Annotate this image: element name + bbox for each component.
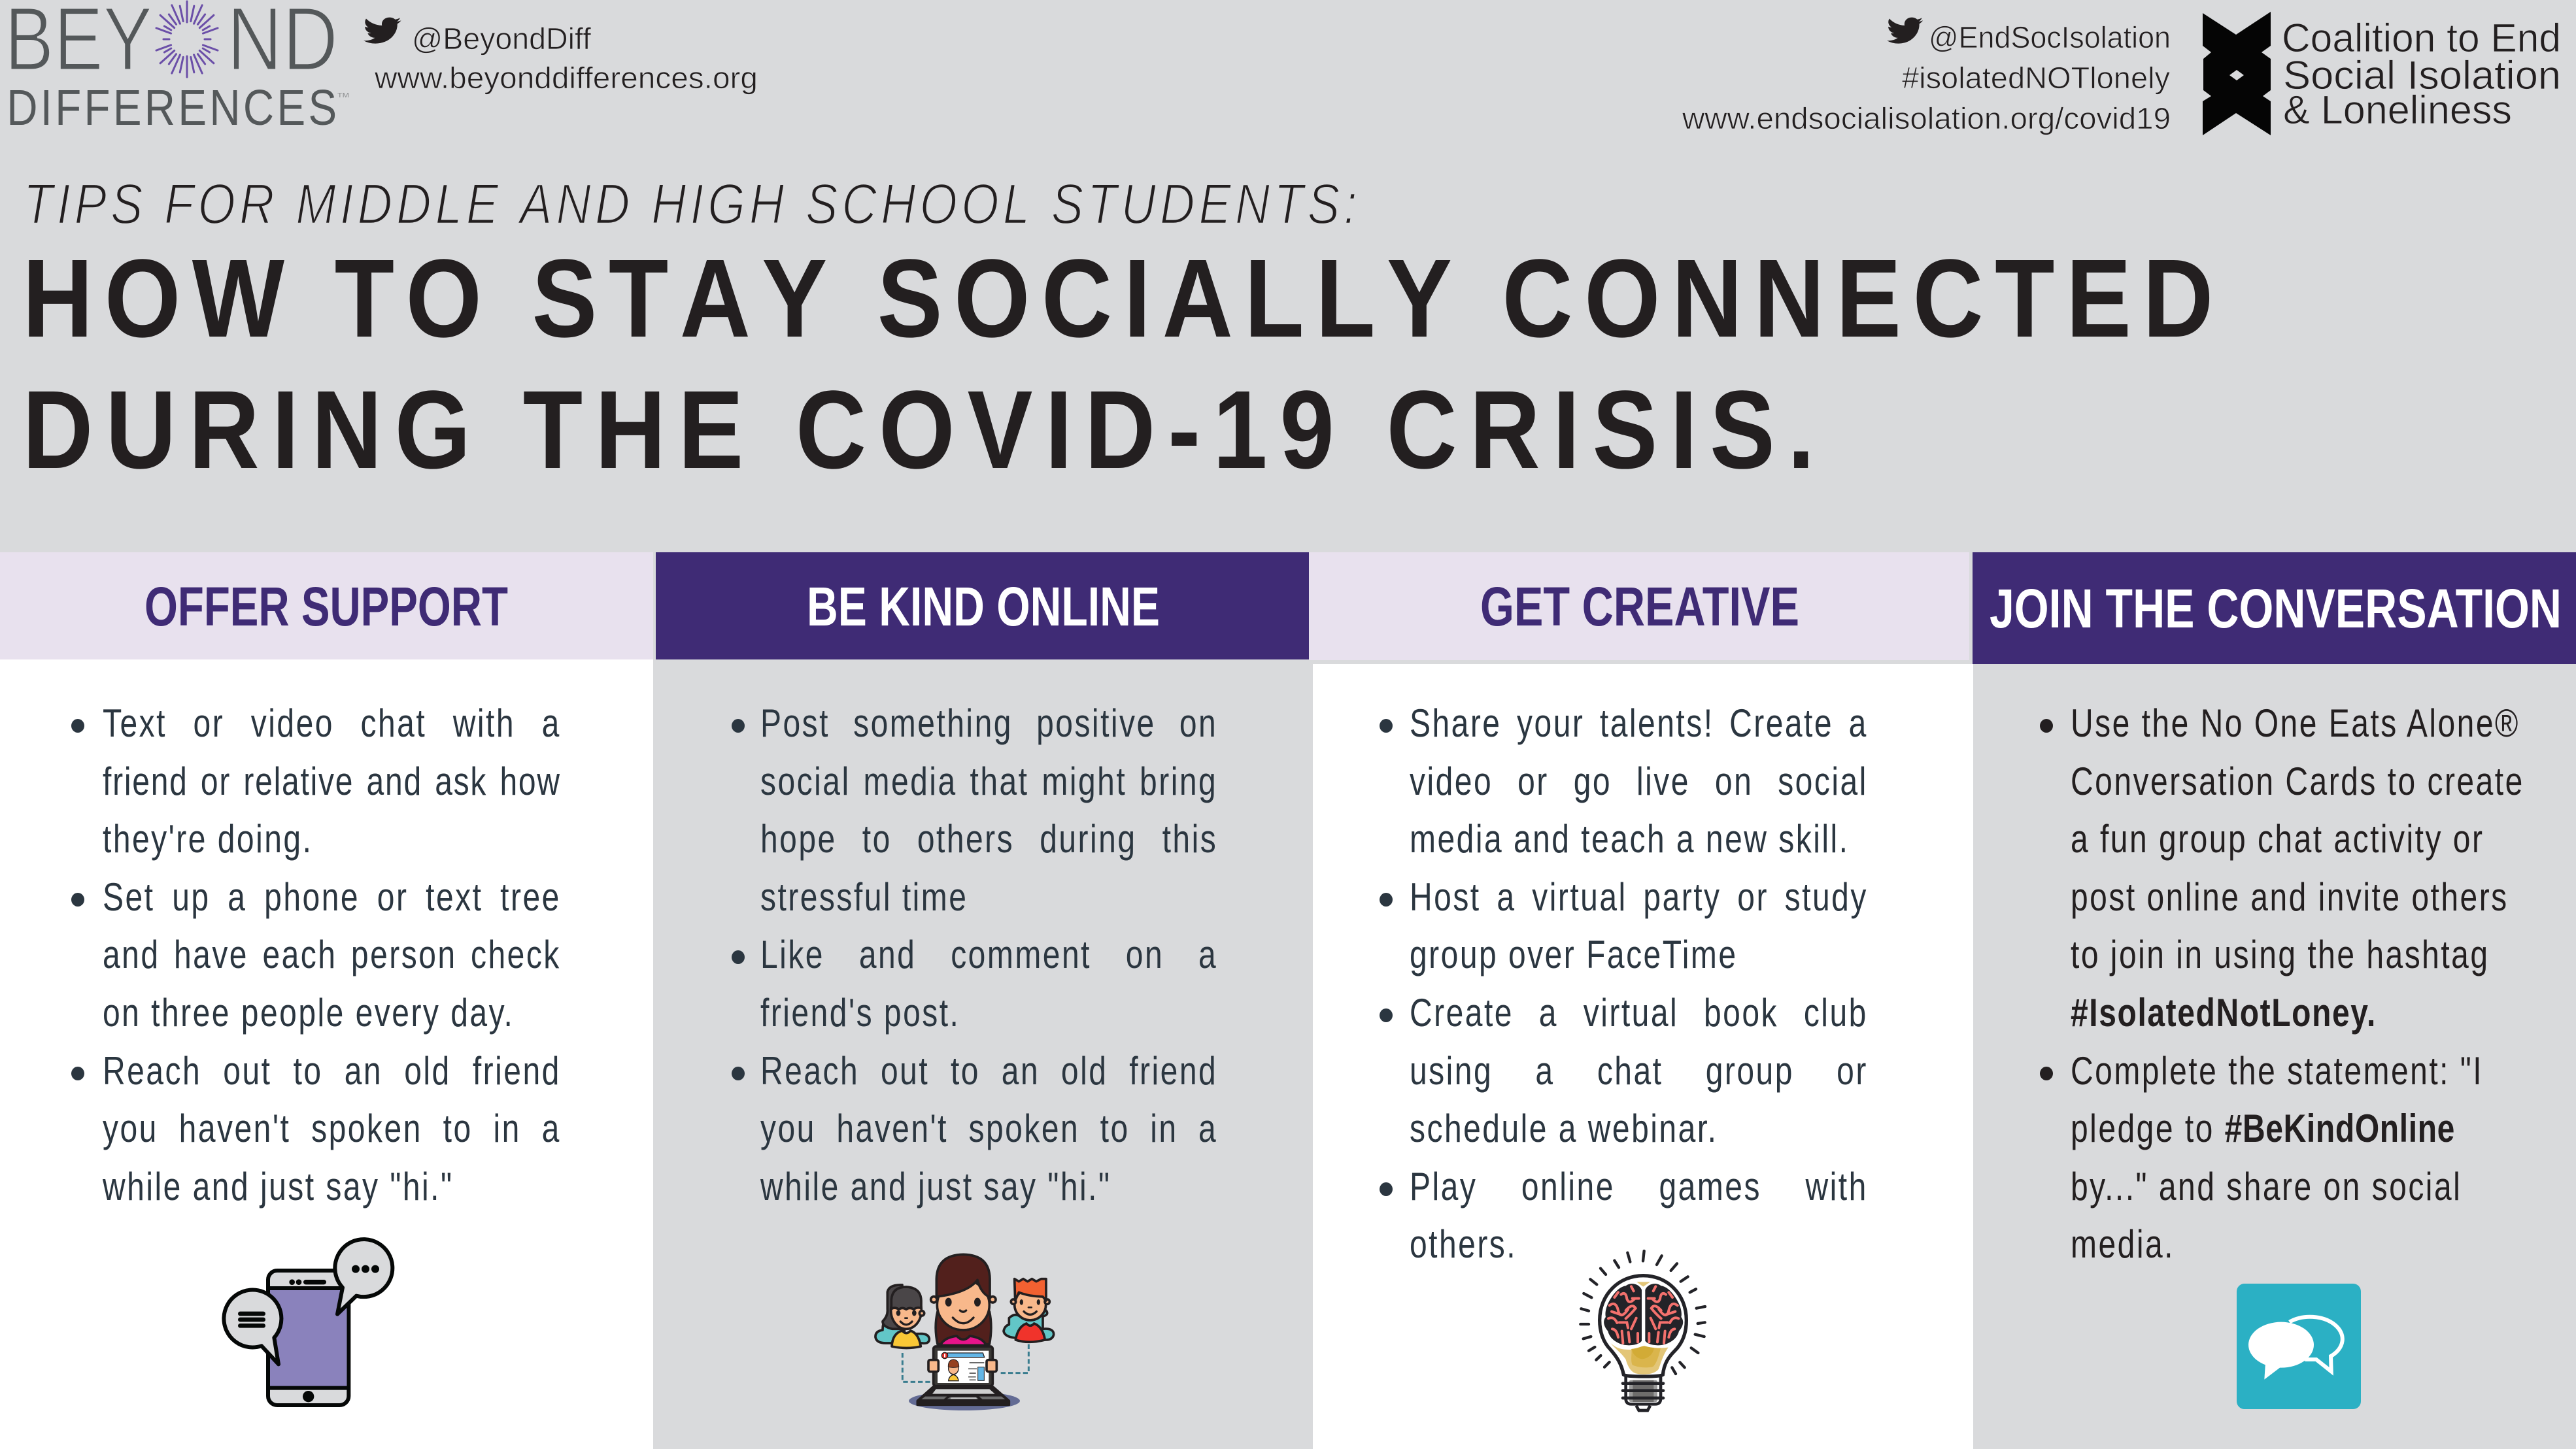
tip: phone or text tree: Set up a phone or text tree (103, 875, 561, 919)
header logos and contact details (5, 0, 2561, 236)
tip: conversation cards: Conversation Cards to create (2071, 759, 2524, 803)
tip: text or video chat: friend or relative and ask how (103, 759, 561, 803)
icon: kids connected around a laptop (874, 1254, 1055, 1410)
tips list: be kind online (732, 701, 1217, 1208)
icon: twitter bird left (364, 18, 401, 44)
tip: complete the statement (2040, 1049, 2483, 1266)
icon: phone with speech bubbles (222, 1237, 395, 1407)
heading: offer support: OFFER SUPPORT (144, 576, 508, 637)
tip: reach out to an old friend: you haven't spoken to in a (760, 1107, 1217, 1150)
icon: twitter bird right (1887, 18, 1923, 44)
text: coalition name: & Loneliness (2283, 88, 2512, 132)
tip: share your talents (1380, 701, 1868, 861)
tip: reach out to an old friend: while and just say "hi." (103, 1165, 454, 1208)
tip: post something positive (732, 701, 1217, 919)
tip: like and comment: Like and comment on a (760, 933, 1217, 976)
tip: virtual book club (1380, 991, 1868, 1150)
tip: like and comment: friend's post. (760, 991, 960, 1035)
tip: reach out to an old friend: Reach out to an old friend (103, 1049, 561, 1093)
tip: reach out to an old friend: while and just say "hi." (760, 1165, 1111, 1208)
tip: complete the statement: pledge to #BeKindOnline (2071, 1107, 2455, 1150)
tip: reach out to an old friend: you haven't spoken to in a (103, 1107, 561, 1150)
tip: post something positive: Post something positive on (760, 701, 1217, 745)
tip: phone or text tree (71, 875, 561, 1035)
tip: conversation cards: #IsolatedNotLoney. (2071, 991, 2377, 1035)
title (22, 236, 2213, 491)
tip: online games (1380, 1165, 1868, 1266)
tip: share your talents: video or go live on social (1410, 759, 1868, 803)
tip: online games: Play online games with (1410, 1165, 1868, 1208)
text: coalition website: www.endsocialisolation.org/covid19 (1682, 101, 2171, 135)
heading: join the conversation (1973, 552, 2576, 664)
tips list: get creative (1380, 701, 1868, 1411)
tip: post something positive: social media that might bring (760, 759, 1217, 803)
tip: conversation cards: a fun group chat activity or (2071, 817, 2484, 861)
tip: like and comment (732, 933, 1217, 1035)
logo: Beyond Differences (5, 0, 349, 136)
tip: conversation cards: Use the No One Eats Alone® (2071, 701, 2520, 745)
tip: virtual book club: using a chat group or (1410, 1049, 1868, 1093)
heading: be kind online: BE KIND ONLINE (807, 576, 1160, 637)
tip: post something positive: hope to others during this (760, 817, 1217, 861)
tips list: join the conversation (2040, 701, 2524, 1409)
logo mark: coalition (2203, 12, 2271, 135)
title: DURING THE COVID-19 CRISIS. (22, 367, 1815, 491)
tip: text or video chat: they're doing. (103, 817, 313, 861)
tip: virtual book club: schedule a webinar. (1410, 1107, 1718, 1150)
text: coalition hashtag: #isolatedNOTlonely (1902, 61, 2170, 95)
subtitle: TIPS FOR MIDDLE AND HIGH SCHOOL STUDENTS: (24, 173, 1357, 236)
logo: Beyond Differences: DIFFERENCES (7, 80, 337, 136)
tips list: offer support (71, 701, 561, 1208)
tip: virtual party: group over FaceTime (1410, 933, 1738, 976)
icon: teal chat bubbles (2237, 1284, 2361, 1409)
tip: post something positive: stressful time (760, 875, 968, 919)
tip: phone or text tree: and have each person check (103, 933, 561, 976)
tip: reach out to an old friend (732, 1049, 1217, 1208)
panel body background (0, 659, 653, 1449)
tip: conversation cards (2040, 701, 2524, 1035)
panel body background (1313, 664, 1973, 1449)
heading: get creative (1309, 552, 1969, 660)
tip: conversation cards: to join in using the hashtag (2071, 933, 2490, 976)
text: Beyond Differences handle: @BeyondDiff (412, 22, 591, 56)
heading: be kind online (656, 552, 1309, 659)
tip: share your talents: Share your talents! Create a (1410, 701, 1868, 745)
text: Beyond Differences website: www.beyonddifferences.org (374, 61, 758, 95)
tip: complete the statement: by..." and share on social (2071, 1165, 2462, 1208)
title: HOW TO STAY SOCIALLY CONNECTED (22, 236, 2213, 360)
text: coalition name: Social Isolation (2283, 53, 2561, 97)
heading: get creative: GET CREATIVE (1480, 576, 1799, 637)
text: coalition name (2282, 16, 2561, 132)
text: coalition handle: @EndSocIsolation (1929, 20, 2171, 54)
panel: get creative (1309, 552, 1973, 1449)
heading: offer support (0, 552, 653, 659)
tip: conversation cards: post online and invite others (2071, 875, 2509, 919)
tip: virtual party (1380, 875, 1868, 976)
text: coalition name: Coalition to End (2282, 16, 2561, 60)
tip: virtual party: Host a virtual party or study (1410, 875, 1868, 919)
tip: phone or text tree: on three people every day. (103, 991, 514, 1035)
tip: online games: others. (1410, 1222, 1517, 1266)
tip: complete the statement: media. (2071, 1222, 2175, 1266)
tip: complete the statement: Complete the statement: "I (2071, 1049, 2483, 1093)
icon: light bulb with brain (1579, 1250, 1706, 1412)
tip: share your talents: media and teach a new skill. (1410, 817, 1849, 861)
tip: reach out to an old friend (71, 1049, 561, 1208)
logo: Beyond Differences: TM (337, 92, 349, 99)
tip: text or video chat (71, 701, 561, 861)
tip: virtual book club: Create a virtual book club (1410, 991, 1868, 1035)
panel: offer support (0, 552, 653, 1449)
tip: text or video chat: Text or video chat with a (103, 701, 561, 745)
tip: reach out to an old friend: Reach out to an old friend (760, 1049, 1217, 1093)
